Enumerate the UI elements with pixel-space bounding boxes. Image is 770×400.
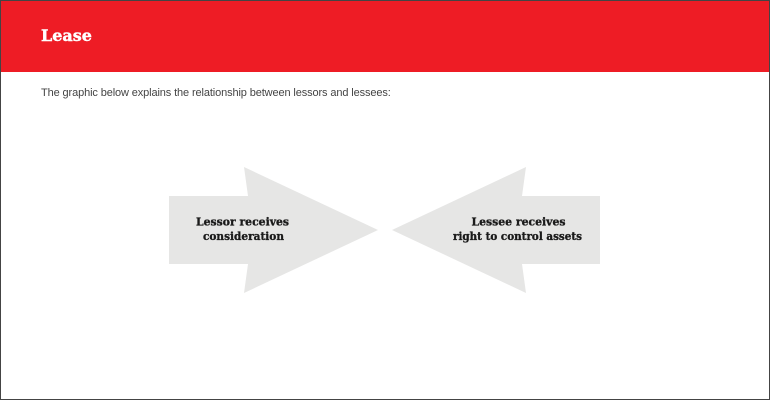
arrow: lessee receives right to control assets: right to control assets bbox=[453, 229, 582, 243]
arrow: lessor receives consideration: consideration bbox=[203, 229, 285, 243]
arrow: lessee receives right to control assets bbox=[392, 167, 600, 293]
intro text: The graphic below explains the relationship between lessors and lessees: bbox=[41, 87, 391, 99]
arrow: lessee receives right to control assets: Lessee receives bbox=[472, 214, 566, 228]
arrow: lessor receives consideration: Lessor receives bbox=[196, 214, 289, 228]
header band bbox=[1, 1, 769, 72]
arrow: lessor receives consideration bbox=[169, 167, 378, 293]
title: Lease bbox=[41, 26, 92, 45]
